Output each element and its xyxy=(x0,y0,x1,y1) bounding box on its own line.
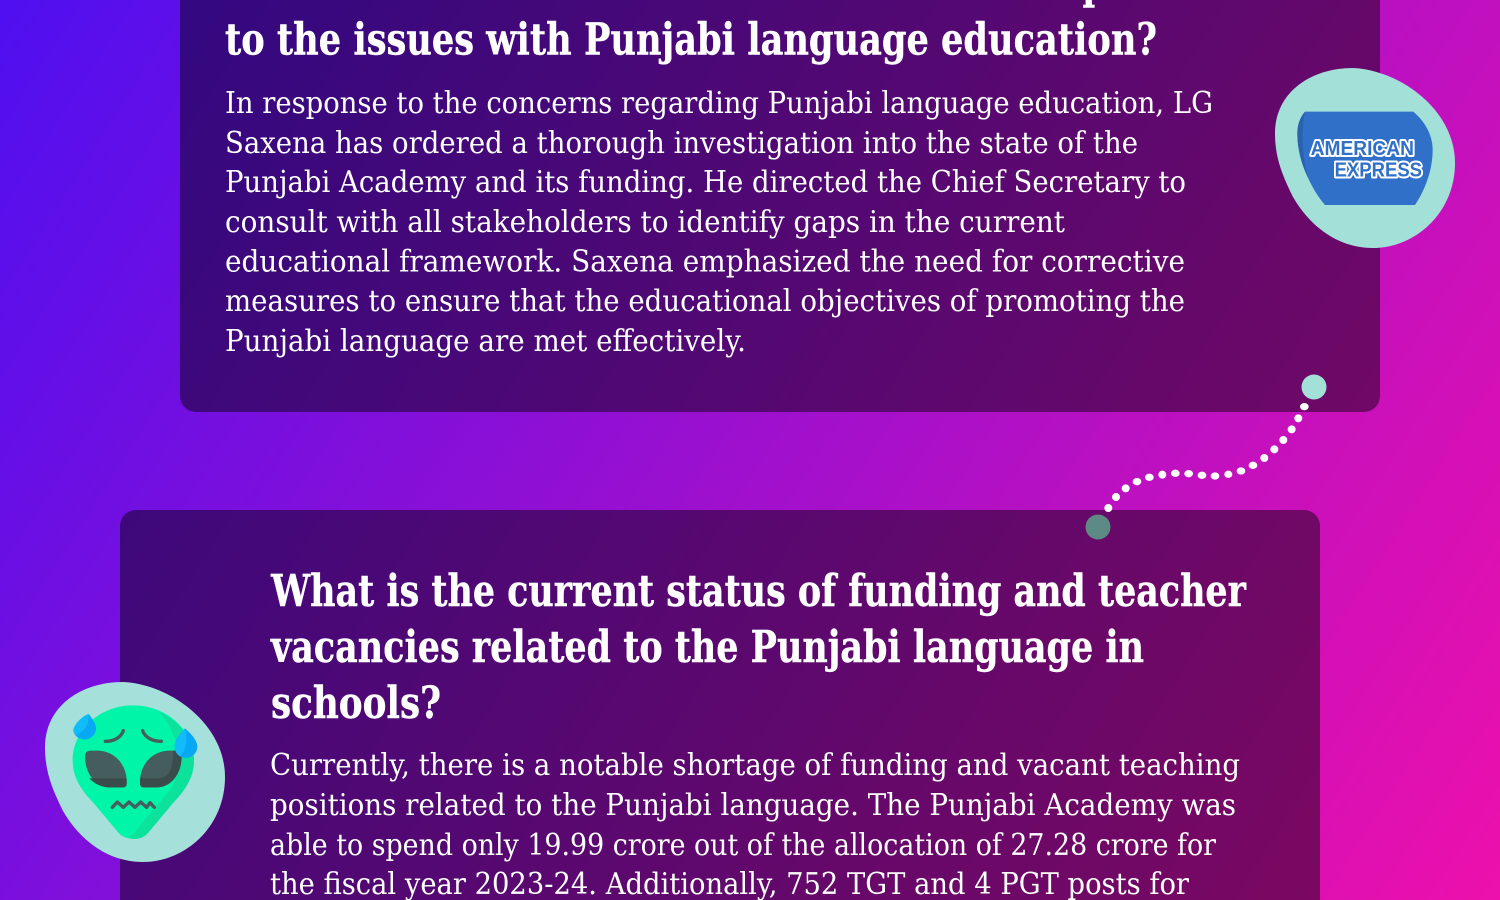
heading: funding and vacancies: What is the current status of funding and teacher xyxy=(270,566,1247,617)
icon: American Express badge: EXPRESS xyxy=(1335,160,1422,182)
heading: funding and vacancies xyxy=(270,566,1247,729)
text block: funding and vacancies xyxy=(270,748,1240,900)
panel: funding and vacancies xyxy=(120,510,1320,900)
heading: funding and vacancies: schools? xyxy=(271,678,441,729)
icon: American Express badge: AMERICAN xyxy=(1311,138,1414,160)
heading: LG response: to the issues with Punjabi language education? xyxy=(225,14,1157,66)
text block: LG response: Punjabi language are met effectively. xyxy=(225,324,746,359)
panel background xyxy=(120,510,1320,900)
text block: funding and vacancies: able to spend only 19.99 crore out of the allocation of 27.28 crore for xyxy=(270,828,1217,863)
alien head xyxy=(73,705,194,839)
icon: dotted connector xyxy=(1104,403,1309,512)
alien brows xyxy=(105,731,161,741)
sweat drops xyxy=(73,714,96,739)
text block: funding and vacancies: Currently, there is a notable shortage of funding and vacant teaching xyxy=(270,748,1240,783)
panel background xyxy=(180,0,1380,412)
icon: American Express badge xyxy=(1275,68,1455,248)
text block: LG response: In response to the concerns regarding Punjabi language education, LG xyxy=(225,86,1213,121)
icon: connector start dot xyxy=(1302,374,1326,400)
panel: LG response xyxy=(180,0,1380,412)
text block: LG response xyxy=(225,86,1213,359)
icon: connector end dot xyxy=(1086,514,1110,540)
text block: funding and vacancies: positions related to the Punjabi language. The Punjabi Academy was xyxy=(270,788,1236,823)
text block: LG response: measures to ensure that the educational objectives of promoting the xyxy=(225,284,1185,319)
alien eyes xyxy=(85,751,127,787)
alien mouth xyxy=(112,802,154,807)
text block: LG response: Saxena has ordered a thorough investigation into the state of the xyxy=(225,126,1138,161)
text block: LG response: educational framework. Saxena emphasized the need for corrective xyxy=(225,244,1185,280)
heading: LG response xyxy=(224,0,1195,66)
text block: LG response: Punjabi Academy and its funding. He directed the Chief Secretary to xyxy=(225,165,1186,200)
text block: LG response: consult with all stakeholders to identify gaps in the current xyxy=(225,205,1065,240)
heading: funding and vacancies: vacancies related to the Punjabi language in xyxy=(270,622,1144,673)
icon: worried alien badge xyxy=(45,682,225,862)
